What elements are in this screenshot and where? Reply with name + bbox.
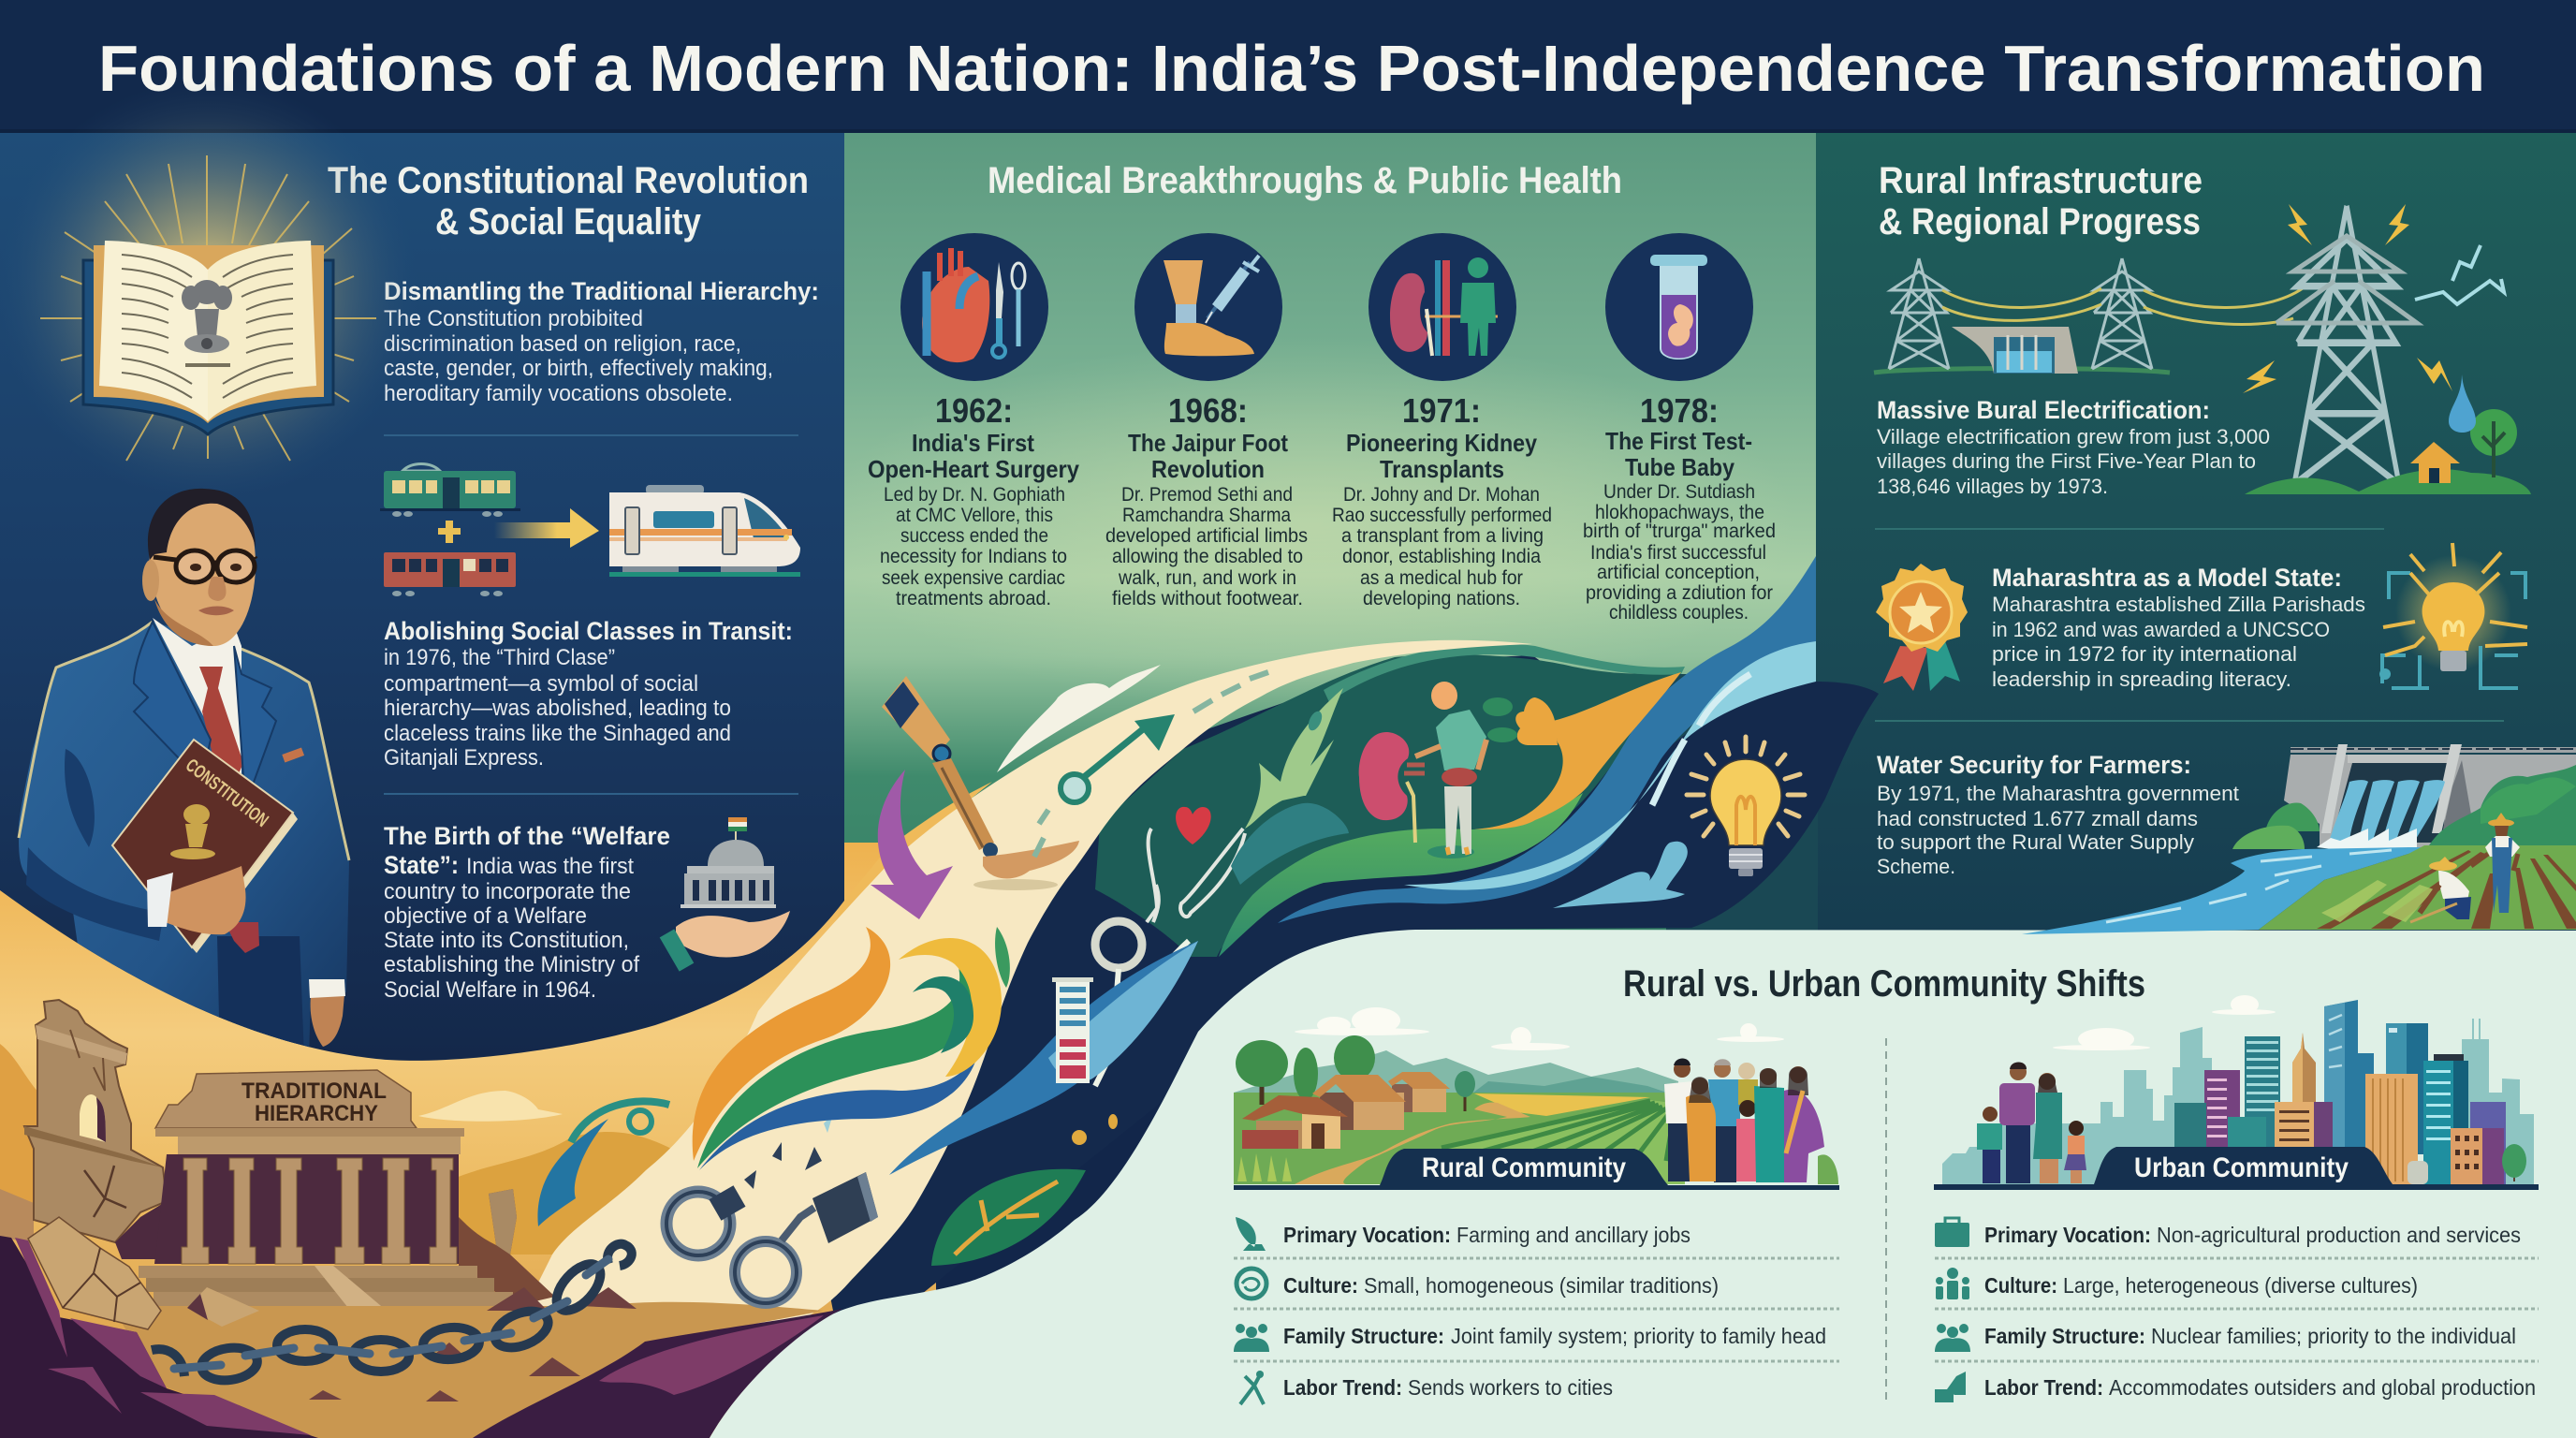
icon: old train coaches becoming a classless train xyxy=(380,464,800,596)
ruin: temple columns xyxy=(139,1128,555,1313)
figure: constitution book: CONSTITUTION xyxy=(182,756,272,831)
row: rural labor trend xyxy=(1240,1371,1613,1404)
row: rural family structure: Joint family system; priority to family head xyxy=(1451,1324,1826,1348)
text block: dismantling hierarchy: heroditary family vocations obsolete. xyxy=(384,381,733,406)
illustration: Dr. Ambedkar holding the constitution xyxy=(19,489,349,1058)
timeline entry: 1971: 1971: xyxy=(1402,391,1481,430)
terrain: broken boulders xyxy=(28,1217,259,1329)
text block: dismantling hierarchy: caste, gender, or birth, effectively making, xyxy=(384,356,773,381)
label: rural community: Rural Community xyxy=(1422,1152,1626,1183)
text block: welfare state: establishing the Ministry of xyxy=(384,952,639,977)
timeline entry: 1962: success ended the xyxy=(900,525,1048,547)
text block: abolishing social classes: in 1976, the “Third Clase” xyxy=(384,645,615,670)
text block: abolishing social classes: compartment—a symbol of social xyxy=(384,671,698,697)
timeline entry: 1968: allowing the disabled to xyxy=(1112,546,1303,567)
rural trees xyxy=(1236,1035,1475,1111)
figure: bending farmer xyxy=(2410,857,2471,922)
timeline entry: 1978: India's first successful xyxy=(1590,542,1766,564)
timeline entry: 1978 xyxy=(1583,391,1776,624)
text block: welfare state xyxy=(384,822,670,1003)
text block: dismantling hierarchy: Dismantling the Traditional Hierarchy: xyxy=(384,277,819,305)
text block: abolishing social classes: Gitanjali Express. xyxy=(384,745,544,770)
icon: test tube with embryo xyxy=(1605,233,1753,381)
row: urban family structure: Nuclear families; priority to the individual xyxy=(2151,1324,2516,1348)
background: sunset sky behind ruins xyxy=(0,843,936,1438)
timeline entry: 1962: necessity for Indians to xyxy=(880,546,1067,567)
icon: water splash xyxy=(1553,842,1688,908)
heading: rural infrastructure: & Regional Progress xyxy=(1879,201,2201,242)
row: urban culture: Culture: xyxy=(1984,1273,2057,1298)
title bar xyxy=(0,0,2576,133)
timeline entry: 1971: Pioneering Kidney xyxy=(1346,429,1537,457)
icon: kidney and human figure xyxy=(1368,233,1516,381)
icon: red coach xyxy=(384,552,516,596)
timeline entry: 1971: donor, establishing India xyxy=(1342,546,1541,567)
title: Foundations of a Modern Nation: India’s Post-Independence Transformation xyxy=(98,32,2485,105)
icon: plus sign xyxy=(438,521,461,543)
row: rural labor trend: Sends workers to cities xyxy=(1408,1375,1613,1400)
arrow: purple downward arrow xyxy=(871,770,953,919)
timeline entry: 1962: 1962: xyxy=(935,391,1013,430)
figure: suit xyxy=(19,622,349,1058)
icon: parliament on an open hand xyxy=(660,817,790,972)
background: right infrastructure panel xyxy=(1666,133,2576,938)
icon: green hill plant xyxy=(1231,688,1349,885)
row: urban family structure: Family Structure: xyxy=(1984,1324,2145,1348)
row: urban culture: Large, heterogeneous (diverse cultures) xyxy=(2063,1273,2418,1298)
urban skyscrapers xyxy=(2174,1000,2526,1186)
illustration: kidney donor figure xyxy=(1359,682,1486,858)
urban family xyxy=(1977,1062,2086,1183)
heading: constitutional revolution: The Constitutional Revolution xyxy=(328,160,809,201)
panel: constitutional revolution background xyxy=(0,133,844,1061)
label: urban community: Urban Community xyxy=(2134,1152,2349,1183)
terrain: purple rocks left xyxy=(0,1236,318,1438)
timeline entry: 1971: Rao successfully performed xyxy=(1332,505,1552,526)
illustration: large pylon with lightning xyxy=(2243,204,2504,484)
illustration: urban community xyxy=(1934,995,2539,1190)
text block: rural electrification: Massive Bural Electrification: xyxy=(1877,396,2210,424)
arrow: teal progress arrow xyxy=(1034,672,1268,857)
text block: welfare state: State into its Constitution, xyxy=(384,928,629,953)
illustration: transmission lines and small dam xyxy=(1874,258,2303,374)
row: urban labor trend xyxy=(1935,1372,2536,1402)
timeline entry: 1978: Tube Baby xyxy=(1625,453,1734,481)
text block: abolishing social classes: Abolishing Social Classes in Transit: xyxy=(384,617,793,645)
timeline entry: 1968: Revolution xyxy=(1151,455,1265,483)
row: urban family structure xyxy=(1935,1324,2516,1352)
text block: maharashtra: Maharashtra established Zilla Parishads xyxy=(1992,593,2365,616)
timeline entry: 1971: Dr. Johny and Dr. Mohan xyxy=(1343,484,1540,506)
illustration: broken handcuffs xyxy=(666,1114,878,1303)
icon: jaipur foot and syringe xyxy=(1134,233,1282,381)
text block: rural electrification: villages during the First Five-Year Plan to xyxy=(1877,449,2256,473)
heading: medical breakthroughs: Medical Breakthroughs & Public Health xyxy=(988,160,1622,201)
illustration: house, tree, drop xyxy=(2245,374,2531,494)
row: rural primary vocation xyxy=(1236,1217,1690,1251)
background: medical panel xyxy=(824,133,1818,938)
timeline entry: 1962: seek expensive cardiac xyxy=(882,567,1065,589)
rural houses xyxy=(1242,1072,1450,1149)
row: urban labor trend: Accommodates outsiders and global production xyxy=(2109,1375,2536,1400)
timeline entry: 1962: treatments abroad. xyxy=(896,588,1051,609)
timeline entry: 1962: at CMC Vellore, this xyxy=(896,505,1053,526)
ruin: temple stone with label: TRADITIONAL xyxy=(242,1078,387,1104)
text block: dismantling hierarchy: The Constitution probibited xyxy=(384,306,643,331)
text block: welfare state: State”: xyxy=(384,851,459,879)
row: rural labor trend: Labor Trend: xyxy=(1283,1375,1402,1400)
illustration: medical tools in the flow xyxy=(889,688,1349,1266)
text block: rural electrification xyxy=(1877,396,2270,498)
row: rural culture: Small, homogeneous (similar traditions) xyxy=(1364,1273,1719,1298)
text block: welfare state: objective of a Welfare xyxy=(384,903,587,929)
heading: rural vs urban: Rural vs. Urban Community Shifts xyxy=(1623,963,2145,1005)
arrow: old to new train xyxy=(494,508,599,548)
icon: modern classless train xyxy=(609,485,800,577)
decoration: tricolor swooshes xyxy=(537,927,1010,1226)
list: rural attributes xyxy=(1234,1217,1826,1404)
timeline entry: 1971: Transplants xyxy=(1380,455,1504,483)
heading: rural infrastructure: Rural Infrastructure xyxy=(1879,160,2203,201)
figure: constitution book xyxy=(112,740,298,953)
background: rural vs urban mint panel xyxy=(710,930,2576,1438)
timeline entry: 1978: hlokhopachways, the xyxy=(1595,502,1764,523)
timeline entry: 1968: walk, run, and work in xyxy=(1118,567,1296,589)
terrain: purple rocks right xyxy=(473,1309,842,1438)
row: urban labor trend: Labor Trend: xyxy=(1984,1375,2103,1400)
row: urban primary vocation: Non-agricultural production and services xyxy=(2157,1223,2521,1247)
illustration: breaking chain xyxy=(152,1244,632,1384)
section: constitutional revolution text xyxy=(328,160,819,1003)
figure: standing farmer xyxy=(2471,813,2520,913)
timeline entry: 1962: India's First xyxy=(912,429,1034,457)
row: rural primary vocation: Primary Vocation: xyxy=(1283,1223,1451,1247)
heading: constitutional revolution: & Social Equality xyxy=(435,201,702,242)
row: urban primary vocation: Primary Vocation: xyxy=(1984,1223,2151,1247)
text block: abolishing social classes: hierarchy—was abolished, leading to xyxy=(384,696,731,721)
row: urban primary vocation xyxy=(1935,1218,2521,1247)
transition: cream road ribbon xyxy=(524,640,1532,1325)
icon: surgical forceps xyxy=(1147,829,1245,922)
transition: river and hill swooshes xyxy=(1095,556,1816,957)
icon: leaf xyxy=(931,1169,1086,1266)
background: navy flowing band xyxy=(796,655,1879,1357)
timeline entry: 1962: Open-Heart Surgery xyxy=(868,455,1079,483)
ruin: temple stone with label xyxy=(155,1070,417,1128)
timeline entry: 1962: Led by Dr. N. Gophiath xyxy=(884,484,1065,506)
timeline entry: 1968: Dr. Premod Sethi and xyxy=(1121,484,1293,506)
text block: water security: to support the Rural Water Supply xyxy=(1877,830,2194,854)
heading: rural infrastructure xyxy=(1879,160,2203,242)
ruin: broken arch and wall xyxy=(24,1000,167,1259)
icon: green coach xyxy=(380,464,520,517)
figure: hands xyxy=(147,866,345,1047)
section: rural infrastructure xyxy=(1874,160,2576,934)
row: rural culture xyxy=(1237,1269,1719,1299)
timeline entry: 1968: The Jaipur Foot xyxy=(1128,429,1288,457)
figure: shirt and tie xyxy=(153,618,242,777)
timeline entry: 1978: providing a zdiution for xyxy=(1586,582,1773,604)
icon: blue flame swoosh xyxy=(889,941,1198,1175)
row: rural family structure: Family Structure: xyxy=(1283,1324,1444,1348)
text block: maharashtra: Maharashtra as a Model State: xyxy=(1992,564,2342,592)
decoration: cloud over green hill xyxy=(997,665,1161,772)
timeline entry: 1978: artificial conception, xyxy=(1597,562,1760,583)
timeline entry: 1968 xyxy=(1105,391,1308,609)
icon: medal xyxy=(1876,564,1968,691)
timeline entry: 1971: as a medical hub for xyxy=(1360,567,1523,589)
illustration: prosthetic leg walking the road xyxy=(882,676,1079,890)
text block: dismantling hierarchy xyxy=(384,277,819,406)
timeline entry: 1968: Ramchandra Sharma xyxy=(1122,505,1291,526)
timeline entry: 1971 xyxy=(1332,391,1552,609)
text block: rural electrification: Village electrification grew from just 3,000 xyxy=(1877,425,2270,448)
icon: stethoscope ring xyxy=(1095,921,1189,1086)
timeline entry: 1978: The First Test- xyxy=(1605,427,1752,455)
text block: water security: Scheme. xyxy=(1877,855,1955,878)
timeline entry: 1971: a transplant from a living xyxy=(1341,525,1544,547)
ruin: temple stone with label: HIERARCHY xyxy=(255,1101,378,1126)
section: rural vs urban community shifts xyxy=(1234,963,2539,1404)
timeline entry: 1962 xyxy=(868,391,1079,609)
heading: constitutional revolution xyxy=(328,160,809,242)
timeline entry: 1978: childless couples. xyxy=(1609,602,1749,624)
timeline entry: 1978: 1978: xyxy=(1640,391,1719,430)
timeline entry: 1968: 1968: xyxy=(1168,391,1248,430)
text block: dismantling hierarchy: discrimination based on religion, race, xyxy=(384,331,741,357)
list: urban attributes xyxy=(1935,1218,2536,1402)
text block: welfare state: India was the first xyxy=(466,854,634,879)
illustration: rural community xyxy=(1234,1007,1839,1190)
rural family xyxy=(1664,1058,1838,1184)
text block: maharashtra xyxy=(1992,564,2365,691)
icon: light bulb with circuits xyxy=(2379,543,2527,688)
text block: rural electrification: 138,646 villages by 1973. xyxy=(1877,475,2108,498)
illustration: crumbling traditional hierarchy ruins xyxy=(0,1000,842,1438)
text block: maharashtra: leadership in spreading literacy. xyxy=(1992,668,2291,691)
text block: water security: had constructed 1.677 zmall dams xyxy=(1877,807,2198,830)
icon: heart and surgical tools xyxy=(900,233,1048,381)
illustration: big dam, river and farmers xyxy=(2022,744,2576,934)
text block: welfare state: country to incorporate the xyxy=(384,879,631,904)
row: urban culture xyxy=(1936,1268,2418,1299)
timeline entry: 1978: Under Dr. Sutdiash xyxy=(1603,481,1755,503)
icon: heart xyxy=(1176,807,1211,844)
text block: water security: By 1971, the Maharashtra government xyxy=(1877,782,2239,805)
row: rural family structure xyxy=(1234,1324,1826,1352)
section: medical breakthroughs xyxy=(868,160,1776,624)
text block: maharashtra: price in 1972 for ity international xyxy=(1992,642,2297,666)
row: rural culture: Culture: xyxy=(1283,1273,1358,1298)
text block: maharashtra: in 1962 and was awarded a UNCSCO xyxy=(1992,618,2330,641)
text block: water security xyxy=(1877,751,2239,878)
figure: head xyxy=(142,489,256,646)
icon: glowing constitution book xyxy=(0,80,418,501)
text block: welfare state: The Birth of the “Welfare xyxy=(384,822,670,850)
timeline entry: 1971: developing nations. xyxy=(1363,588,1520,609)
text block: welfare state: Social Welfare in 1964. xyxy=(384,977,596,1003)
text block: abolishing social classes: claceless trains like the Sinhaged and xyxy=(384,721,731,746)
timeline entry: 1968: fields without footwear. xyxy=(1112,588,1303,609)
icon: measuring tube xyxy=(1052,977,1093,1083)
timeline entry: 1978: birth of "trurga" marked xyxy=(1583,521,1776,542)
icon: light bulb in flow xyxy=(1687,737,1805,876)
row: rural primary vocation: Farming and ancillary jobs xyxy=(1456,1223,1690,1247)
text block: water security: Water Security for Farmers: xyxy=(1877,751,2191,779)
terrain: sand ground xyxy=(112,1302,824,1438)
timeline entry: 1968: developed artificial limbs xyxy=(1105,525,1308,547)
text block: abolishing social classes xyxy=(384,617,793,770)
